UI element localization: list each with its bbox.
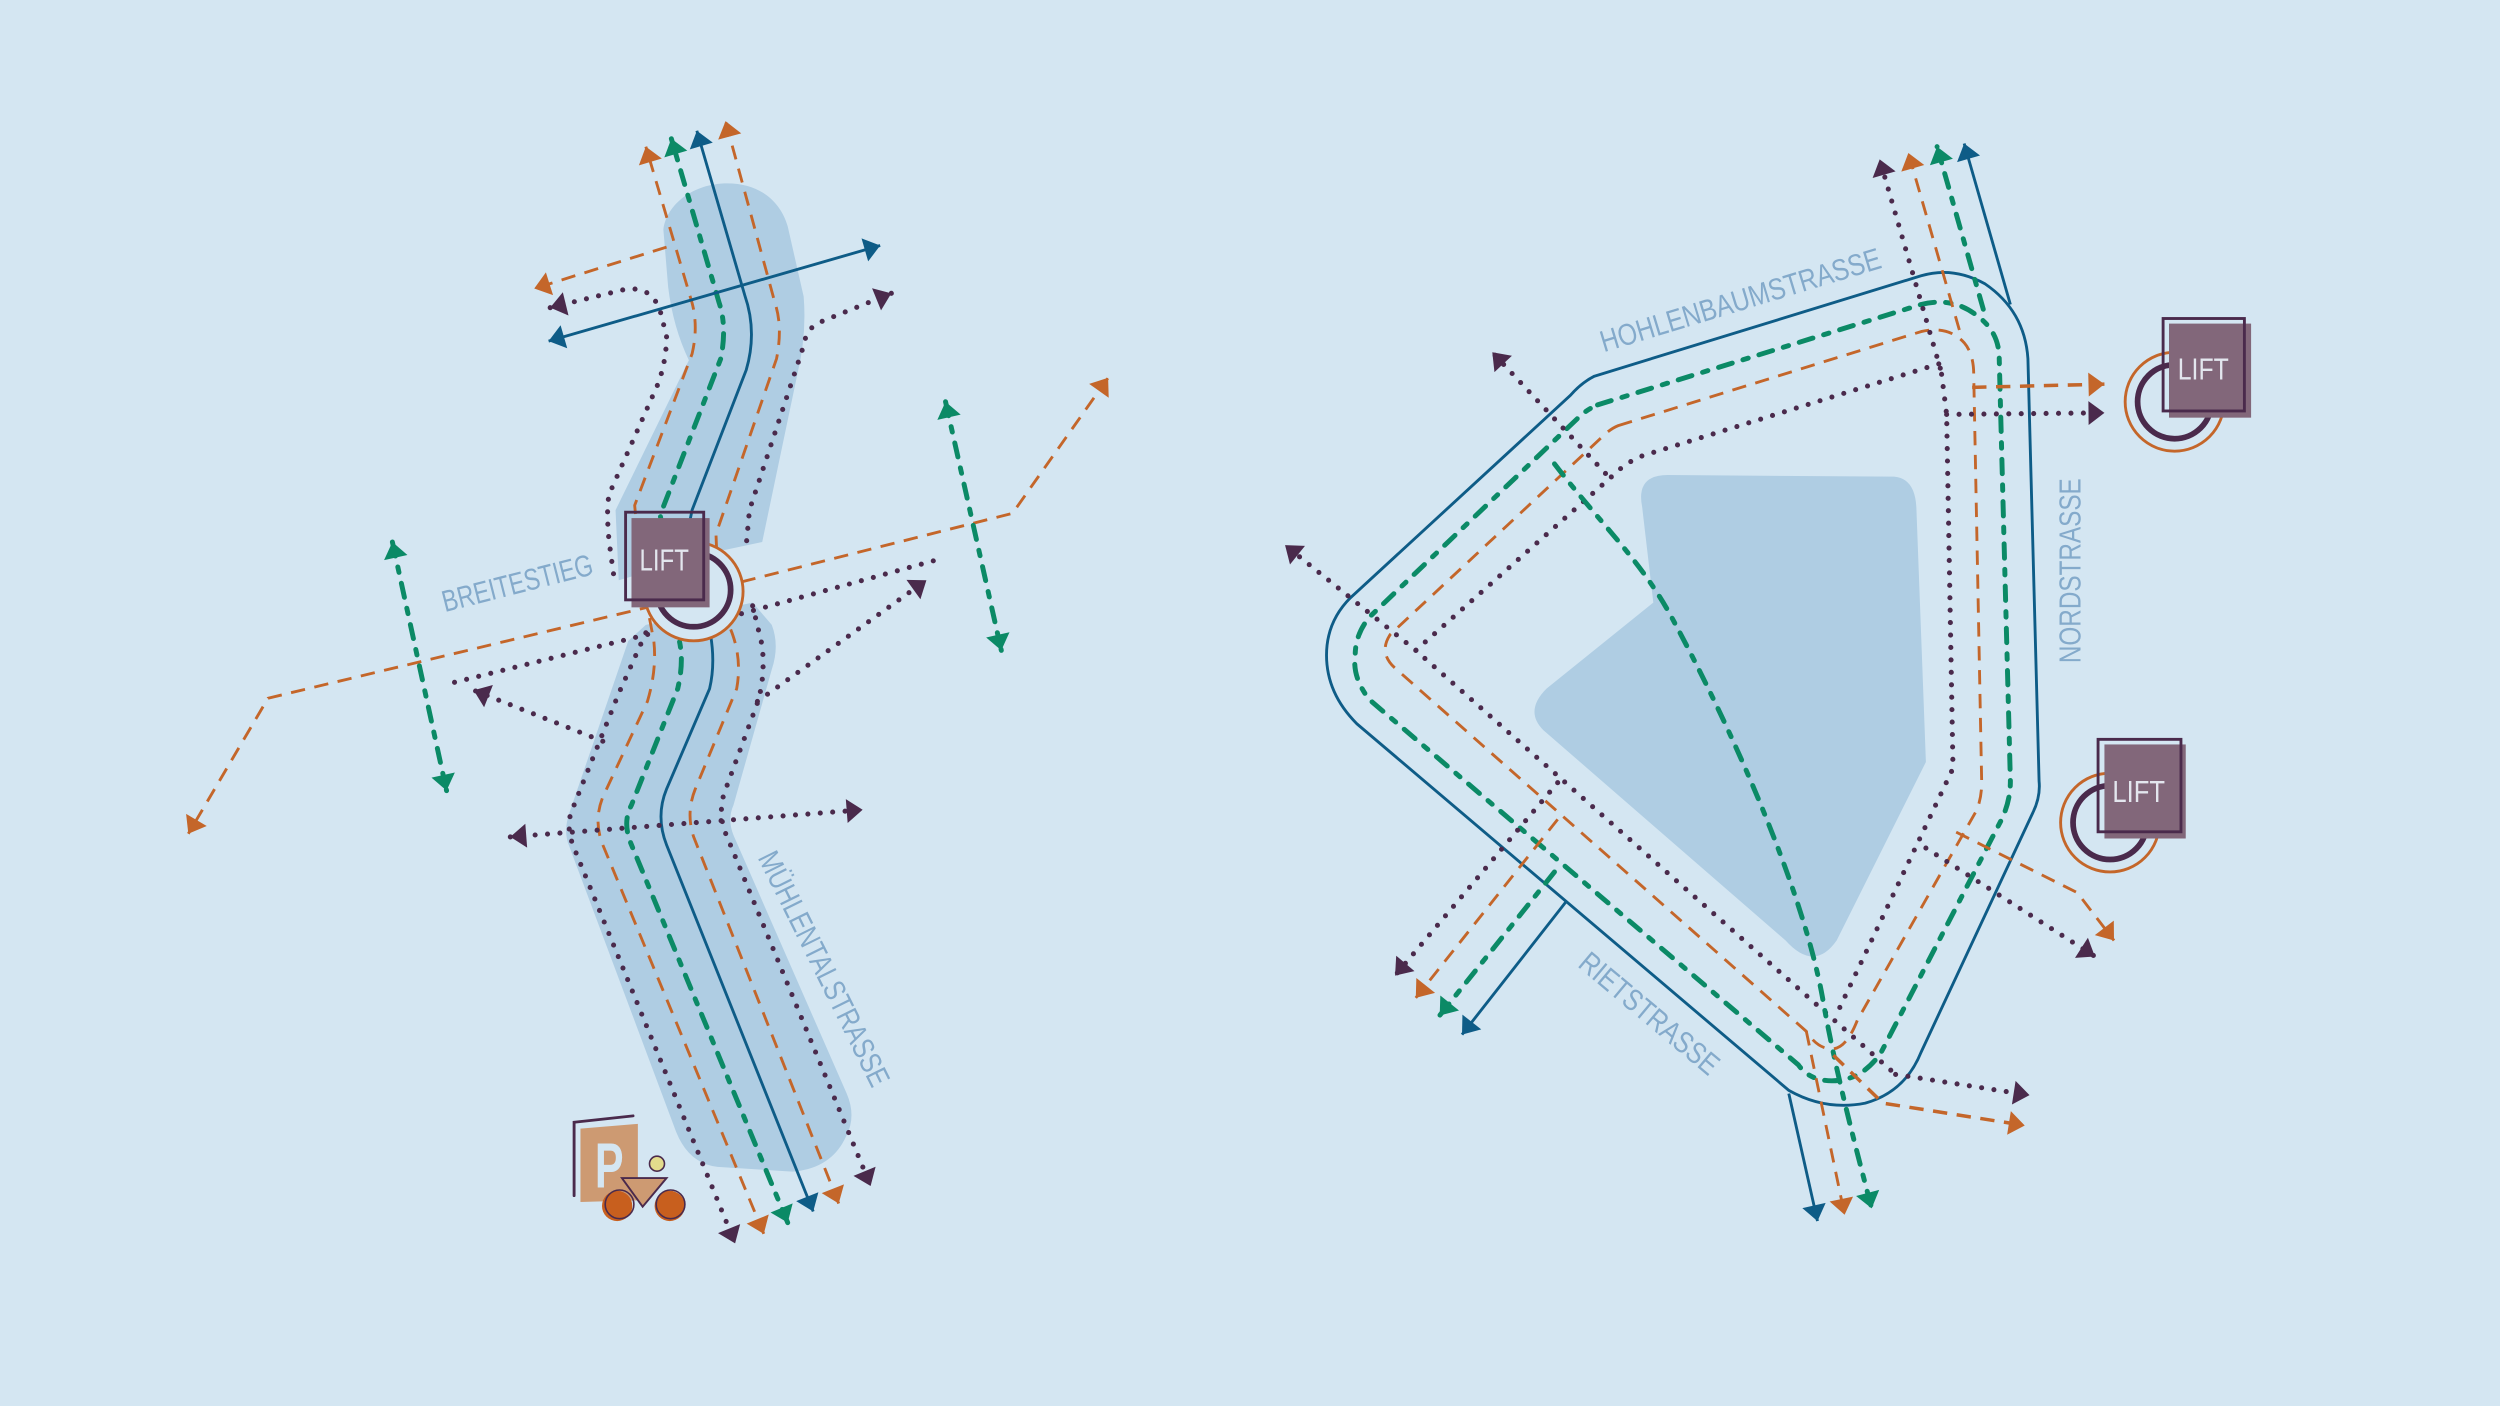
parking and bicycle icon: P	[595, 1130, 624, 1202]
left map: Mühlentalstrasse and Breitestieg	[188, 121, 1108, 1243]
top branch routes	[1880, 143, 2010, 368]
bottom branch routes	[1285, 352, 2030, 1221]
ring routes	[1327, 272, 2039, 1105]
lower-left branch routes	[1395, 783, 1566, 1035]
street label: Breitestieg: BREITESTIEG	[439, 549, 597, 619]
parking and bicycle icon	[574, 1116, 685, 1221]
street label: Nordstrasse: NORDSTRASSE	[2055, 478, 2088, 663]
street band lower	[566, 603, 851, 1172]
lift icon top right: LIFT	[2178, 353, 2229, 386]
right branch routes	[1926, 384, 2114, 956]
lift icon lower right: LIFT	[2112, 776, 2165, 809]
street label: Rietstrasse: RIETSTRASSE	[1572, 946, 1725, 1082]
street band upper	[616, 183, 804, 580]
park area	[1534, 475, 1926, 956]
street label: Hohlenbaumstrasse: HOHLENBAUMSTRASSE	[1596, 243, 1885, 359]
street label: Mühlentalstrasse: MÜHLENTALSTRASSE	[751, 846, 896, 1092]
right map: ring road around the park	[1285, 143, 2251, 1221]
lift icon top right	[2125, 319, 2251, 451]
crossing routes	[188, 245, 1108, 837]
lift icon: LIFT	[639, 545, 689, 578]
lift icon lower right	[2061, 739, 2186, 872]
route lines along the street	[550, 121, 891, 1243]
lift icon	[626, 512, 743, 641]
